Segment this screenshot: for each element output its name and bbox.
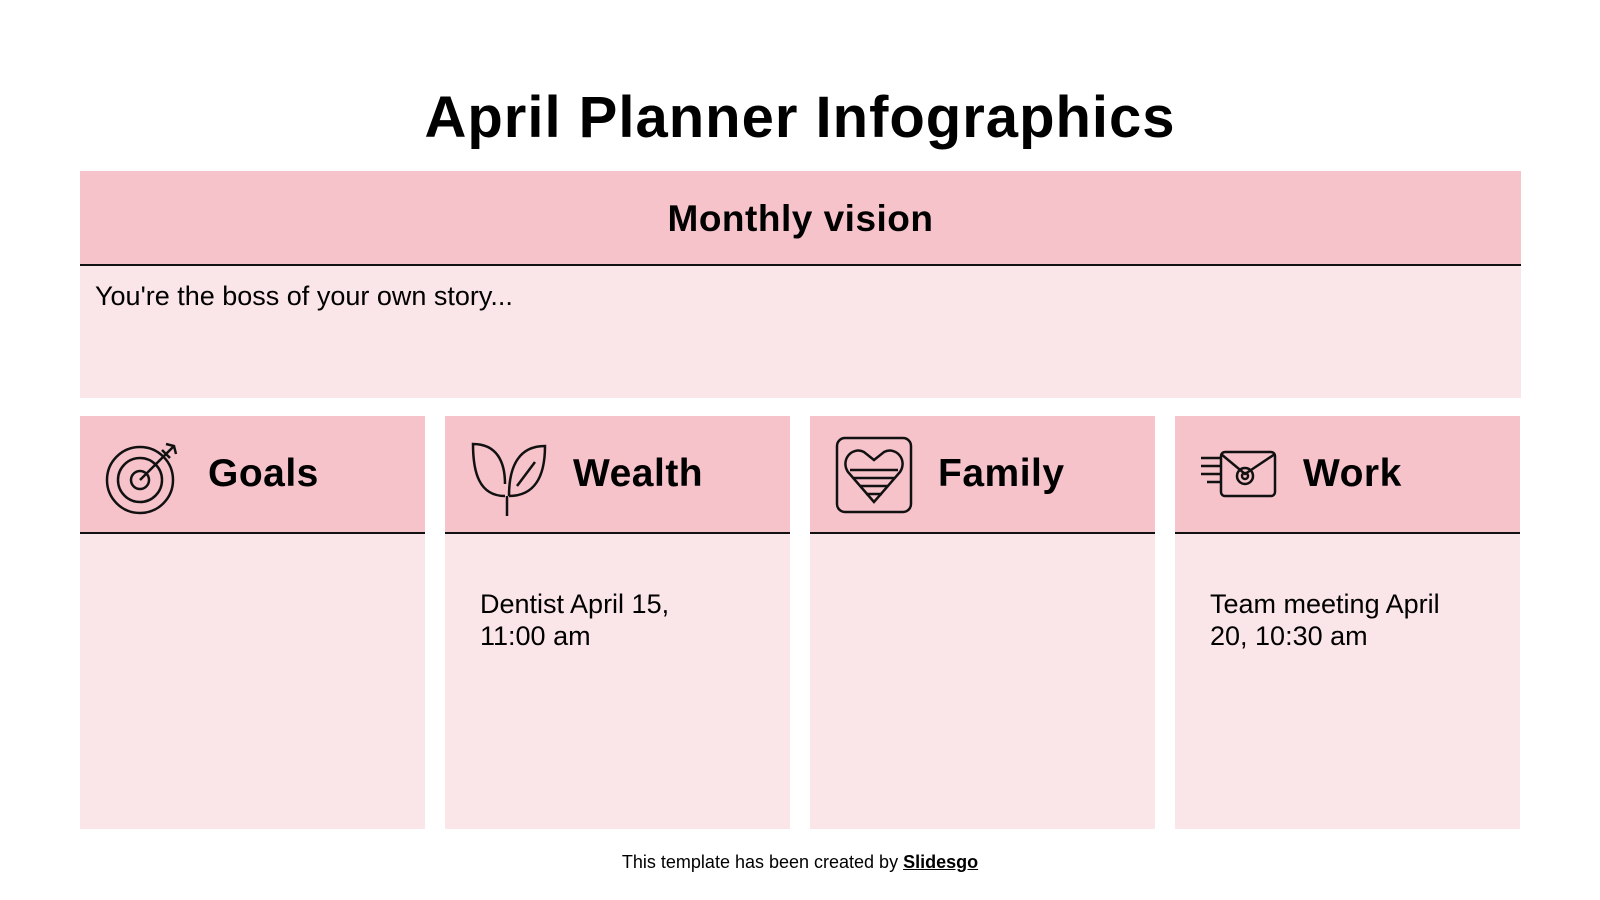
title: April Planner Infographics bbox=[424, 85, 1176, 150]
monthly vision text: You're the boss of your own story... bbox=[95, 281, 513, 311]
work heading: Work bbox=[1303, 452, 1402, 495]
work text: 20, 10:30 am bbox=[1210, 621, 1368, 651]
icon: target bbox=[106, 442, 178, 514]
icon: sprout bbox=[472, 442, 546, 516]
panel: work bbox=[1175, 416, 1520, 829]
wealth heading: Wealth bbox=[573, 452, 703, 495]
icon: envelope bbox=[1201, 450, 1276, 498]
work text: Team meeting April bbox=[1210, 589, 1440, 619]
panel: family bbox=[810, 416, 1155, 829]
monthly vision text bbox=[80, 266, 1521, 398]
footer: This template has been created by Slidesgo bbox=[622, 852, 978, 872]
wealth text: Dentist April 15, bbox=[480, 589, 669, 619]
work text bbox=[1210, 589, 1440, 651]
monthly vision header bbox=[80, 171, 1521, 266]
goals heading: Goals bbox=[208, 452, 319, 495]
panel: goals bbox=[80, 416, 425, 829]
wealth text: 11:00 am bbox=[480, 621, 591, 651]
wealth text bbox=[480, 589, 669, 651]
monthly vision header: Monthly vision bbox=[668, 198, 934, 239]
family heading: Family bbox=[938, 452, 1065, 495]
panel: wealth bbox=[445, 416, 790, 829]
icon: heart bbox=[836, 436, 912, 514]
